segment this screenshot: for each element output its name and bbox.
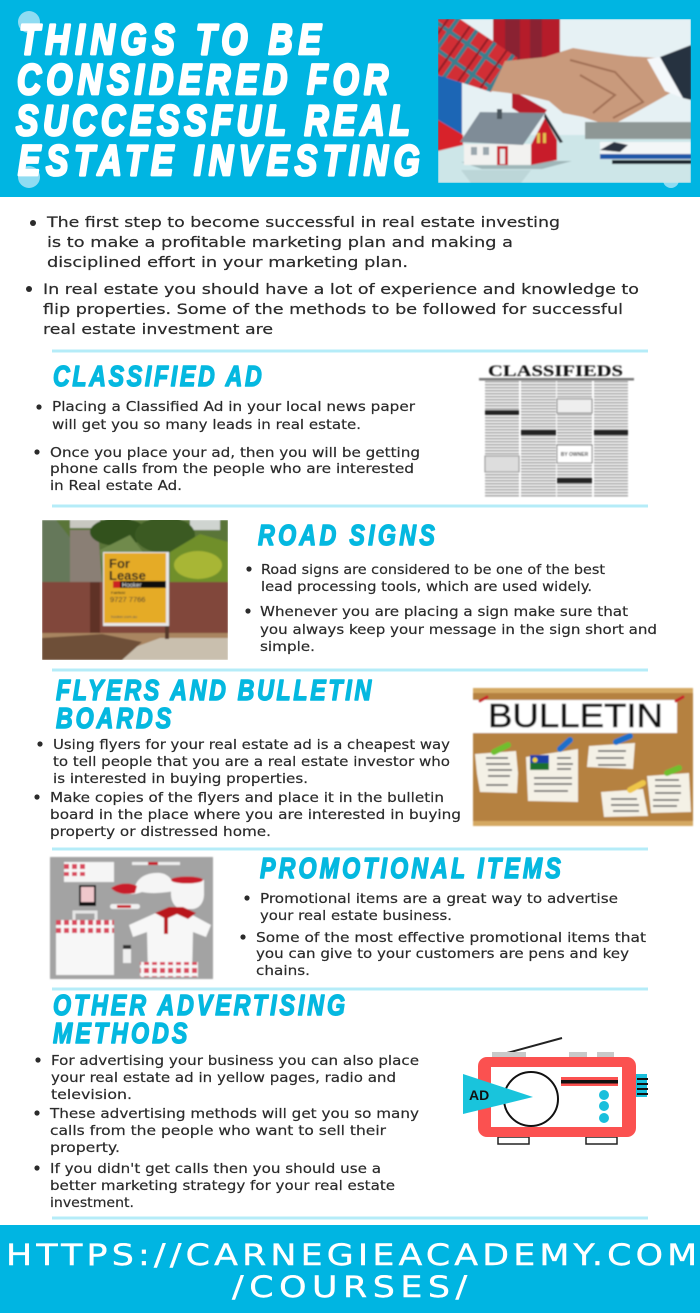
text: classified ad bullets: Once you place your ad, then you will be getting	[50, 445, 420, 461]
intro bullets: In real estate you should have a lot of experience and knowledge to	[43, 282, 639, 298]
icon: radio with AD megaphone: AD	[469, 1087, 489, 1103]
image: for lease road sign: hooker.com.au	[111, 614, 137, 619]
text: flyers bullets: to tell people that you are a real estate investor who	[53, 754, 450, 770]
intro bullets: flip properties. Some of the methods to be followed for successful	[43, 302, 623, 318]
text: promotional items bullets: you can give to your customers are pens and key	[256, 946, 629, 962]
heading: classified ad: CLASSIFIED AD	[53, 359, 262, 393]
heading: promotional items: PROMOTIONAL ITEMS	[260, 851, 561, 885]
text: road signs bullets: lead processing tools, which are used widely.	[261, 579, 592, 595]
title: ESTATE INVESTING	[18, 137, 420, 185]
title: THINGS TO BE	[19, 16, 322, 64]
image: classifieds newspaper	[479, 363, 634, 497]
title	[16, 16, 420, 185]
image: classifieds newspaper: BY OWNER	[561, 452, 589, 458]
text: flyers bullets: Using flyers for your real estate ad is a cheapest way	[53, 737, 450, 753]
text: road signs bullets: Road signs are considered to be one of the best	[261, 562, 605, 578]
intro bullets	[26, 215, 639, 338]
text: flyers bullets: board in the place where you are interested in buying	[50, 807, 461, 823]
text: classified ad bullets: phone calls from the people who are interested	[50, 461, 414, 477]
title: SUCCESSFUL REAL	[16, 97, 410, 145]
text: promotional items bullets: Promotional items are a great way to advertise	[260, 891, 618, 907]
image: promotional items	[50, 857, 213, 979]
text: promotional items bullets: Some of the most effective promotional items that	[256, 930, 646, 946]
intro bullets: is to make a profitable marketing plan and making a	[47, 235, 513, 251]
text: road signs bullets: simple.	[260, 639, 315, 655]
heading: road signs: ROAD SIGNS	[258, 518, 435, 552]
heading: other advertising methods	[53, 988, 345, 1050]
text: other advertising bullets: If you didn't get calls then you should use a	[50, 1161, 381, 1177]
heading: flyers and bulletin boards: BOARDS	[56, 701, 172, 735]
heading: flyers and bulletin boards: FLYERS AND BULLETIN	[56, 673, 372, 707]
text: other advertising bullets	[34, 1053, 419, 1211]
text: promotional items bullets: your real estate business.	[260, 908, 452, 924]
icon: radio with AD megaphone	[463, 1038, 648, 1144]
text: road signs bullets	[245, 562, 657, 655]
text: classified ad bullets: in Real estate Ad.	[50, 478, 182, 494]
photo: handshake over model house	[438, 19, 691, 183]
heading: other advertising methods: OTHER ADVERTISING	[53, 988, 345, 1022]
image: for lease road sign: 9727 7766	[110, 595, 145, 604]
heading: flyers and bulletin boards	[56, 673, 372, 735]
image: bulletin board	[473, 688, 693, 826]
footer banner with URL	[0, 1225, 700, 1313]
text: other advertising bullets: property.	[50, 1140, 120, 1156]
image: for lease road sign	[42, 517, 228, 660]
title: CONSIDERED FOR	[17, 56, 388, 104]
image: classifieds newspaper: CLASSIFIEDS	[488, 363, 623, 380]
text: classified ad bullets: will get you so many leads in real estate.	[52, 417, 361, 433]
text: other advertising bullets: investment.	[50, 1195, 134, 1211]
text: road signs bullets: you always keep your message in the sign short and	[260, 622, 657, 638]
text: flyers bullets: Make copies of the flyers and place it in the bulletin	[50, 790, 444, 806]
image: for lease road sign: Fairfield	[111, 590, 125, 595]
text: other advertising bullets: These advertising methods will get you so many	[49, 1106, 419, 1122]
text: flyers bullets	[34, 737, 461, 840]
footer banner with URL: HTTPS://CARNEGIEACADEMY.COM	[6, 1238, 697, 1272]
text: classified ad bullets: Placing a Classified Ad in your local news paper	[52, 399, 415, 415]
text: flyers bullets: property or distressed home.	[50, 824, 271, 840]
image: bulletin board: BULLETIN	[488, 697, 663, 734]
text: other advertising bullets: better marketing strategy for your real estate	[50, 1178, 395, 1194]
text: classified ad bullets	[34, 399, 420, 494]
text: flyers bullets: is interested in buying properties.	[53, 771, 308, 787]
image: for lease road sign: Hooker	[122, 583, 141, 589]
intro bullets: real estate investment are	[43, 322, 273, 338]
text: road signs bullets: Whenever you are placing a sign make sure that	[260, 604, 628, 620]
text: promotional items bullets	[240, 891, 646, 979]
text: other advertising bullets: your real estate ad in yellow pages, radio and	[51, 1070, 396, 1086]
image: for lease road sign: For	[109, 556, 130, 571]
image: for lease road sign: Lease	[109, 568, 146, 583]
header banner	[0, 0, 700, 197]
text: other advertising bullets: television.	[51, 1087, 132, 1103]
heading: other advertising methods: METHODS	[53, 1016, 188, 1050]
intro bullets: The first step to become successful in real estate investing	[46, 215, 560, 231]
footer banner with URL: /COURSES/	[232, 1270, 467, 1304]
intro bullets: disciplined effort in your marketing plan.	[47, 255, 408, 271]
text: other advertising bullets: calls from the people who want to sell their	[50, 1123, 387, 1139]
text: other advertising bullets: For advertising your business you can also place	[51, 1053, 419, 1069]
text: promotional items bullets: chains.	[256, 963, 310, 979]
